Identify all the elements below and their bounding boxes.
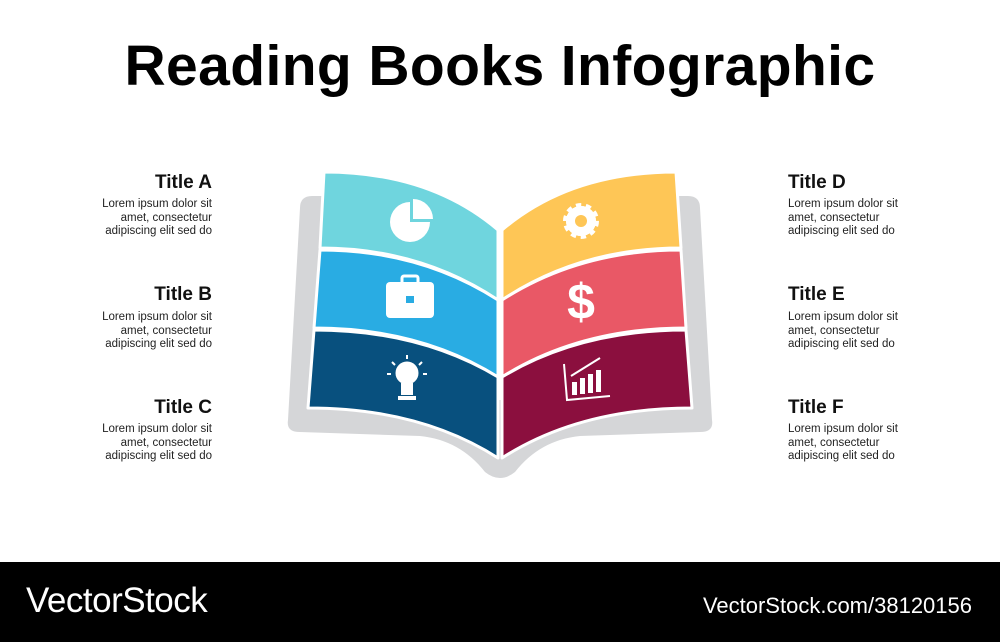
text: Title D [788,172,846,193]
text: Lorem ipsum dolor sit [788,311,898,323]
band E [502,250,686,377]
text: Title D [788,172,898,237]
page bands [308,172,692,458]
icon: growth chart [564,358,610,400]
text: adipiscing elit sed do [105,450,212,462]
band D [502,172,681,300]
icon: light bulb [387,355,427,400]
back cover [288,196,712,478]
text: Title B [154,284,212,305]
text: amet, consectetur [788,436,879,448]
icon: gear [566,206,596,236]
title: Reading Books Infographic [124,34,876,98]
text: Title C [102,397,212,462]
band A [320,172,498,300]
band F [502,330,692,458]
footer logo: VectorStock [26,581,207,620]
text: adipiscing elit sed do [788,338,895,350]
text: Title C [154,397,212,418]
icon: pie chart [390,199,433,242]
footer bar [0,562,1000,642]
text: amet, consectetur [788,324,879,336]
text: amet, consectetur [121,212,212,224]
band C [308,330,498,458]
text: adipiscing elit sed do [788,450,895,462]
text: Lorem ipsum dolor sit [102,198,212,210]
text: Title B [102,284,212,350]
footer url: VectorStock.com/38120156 [703,593,972,618]
text: Title E [788,284,845,305]
text: Title A [102,172,212,237]
text: Title E [788,284,898,350]
band B [314,250,498,377]
text: amet, consectetur [121,436,212,448]
text: Lorem ipsum dolor sit [102,423,212,435]
icon: dollar: $ [567,274,595,330]
text: adipiscing elit sed do [105,338,212,350]
text: Lorem ipsum dolor sit [102,311,212,323]
text: adipiscing elit sed do [788,225,895,237]
text: Title F [788,397,844,418]
icon: briefcase [386,276,434,318]
text: amet, consectetur [788,212,879,224]
text: adipiscing elit sed do [105,225,212,237]
text: Lorem ipsum dolor sit [788,423,898,435]
text: Title A [155,172,212,193]
text: Lorem ipsum dolor sit [788,198,898,210]
text: Title F [788,397,898,462]
text: amet, consectetur [121,324,212,336]
